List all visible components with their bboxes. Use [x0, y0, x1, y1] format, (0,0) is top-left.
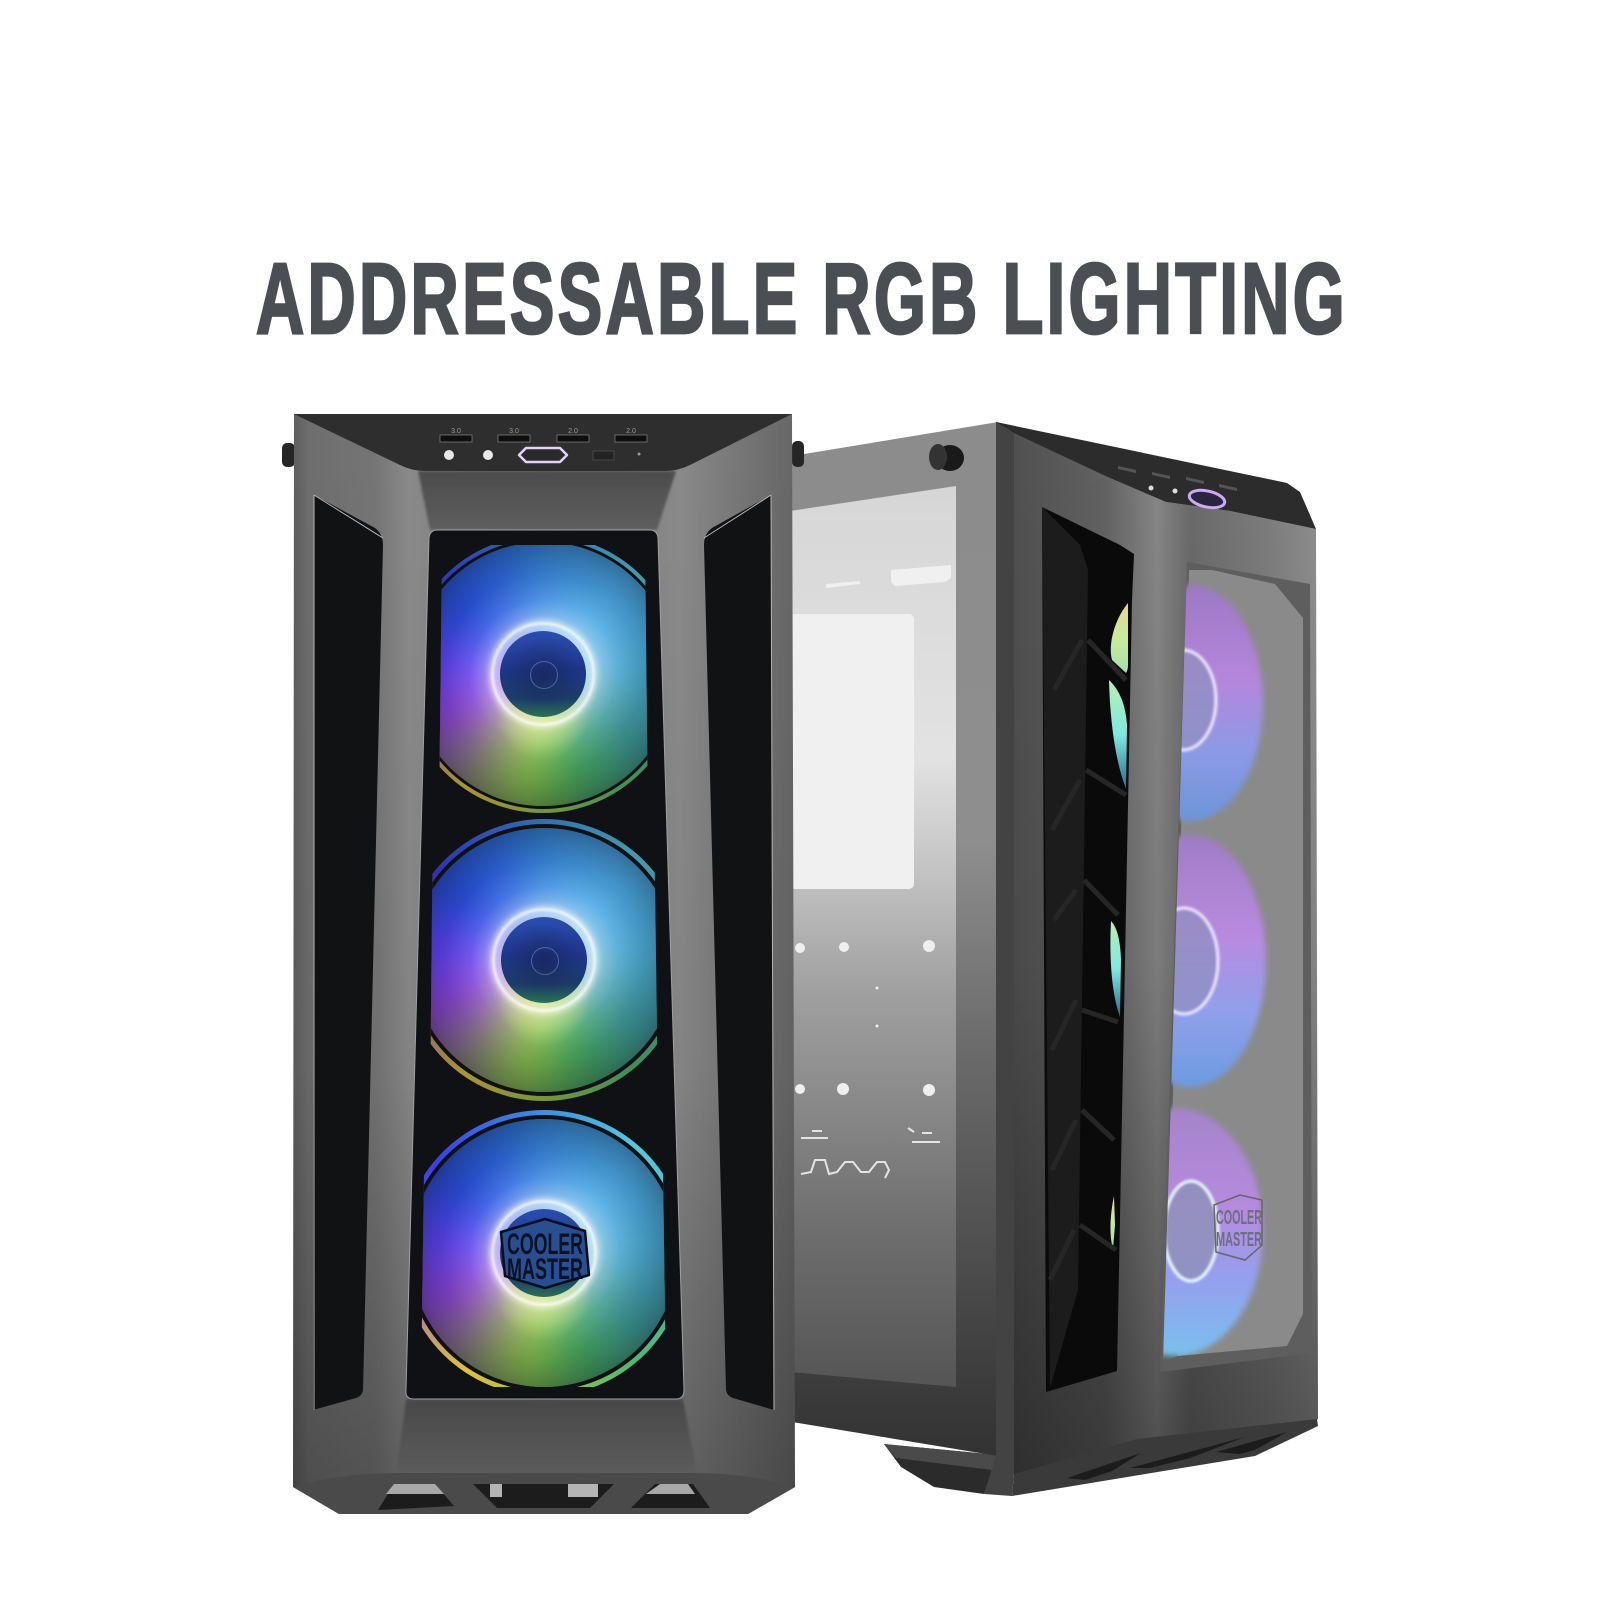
mesh front panel	[1160, 562, 1312, 1372]
internal drive bars	[826, 565, 951, 588]
top I/O panel, angled	[996, 422, 1316, 529]
glowing fans seen through mesh	[1163, 581, 1270, 1360]
side panel frame	[780, 422, 998, 1456]
USB port labels	[451, 428, 636, 435]
USB port labels: 2.0	[568, 428, 578, 435]
USB ports	[440, 435, 647, 442]
slot fan mount ribs	[1050, 640, 1126, 1280]
mesh logo text: MASTER	[1216, 1229, 1262, 1251]
hub logo: MASTER	[507, 1253, 583, 1286]
reset button	[593, 451, 614, 460]
case body	[293, 414, 795, 1514]
USB port labels: 2.0	[626, 428, 636, 435]
rear case: side and front angled view	[780, 422, 1318, 1496]
hub logo: COOLER	[507, 1228, 583, 1261]
mesh logo text	[1214, 1195, 1262, 1260]
right thumbscrew	[792, 441, 804, 467]
side ventilation slot	[1042, 507, 1134, 1392]
right vent slot	[704, 495, 774, 1410]
indicator	[638, 452, 640, 456]
mesh logo text: COOLER	[1216, 1207, 1262, 1229]
USB port labels: 3.0	[451, 428, 461, 435]
upper centre fascia	[418, 471, 676, 530]
RGB fan 1	[440, 545, 648, 813]
left thumbscrew	[282, 443, 295, 467]
hub logo	[501, 1219, 589, 1288]
right base vent	[631, 1484, 710, 1508]
centre base vent	[473, 1484, 614, 1508]
fan window	[406, 530, 684, 1399]
top I/O panel	[294, 414, 792, 471]
base chamfer with vents	[293, 1473, 795, 1514]
RGB fan 2	[430, 819, 658, 1101]
side body panel	[1014, 430, 1318, 1480]
audio jacks	[444, 450, 493, 460]
internal light panel	[790, 614, 914, 889]
USB port labels: 3.0	[509, 428, 519, 435]
lower centre fascia	[396, 1399, 697, 1473]
power button ring	[519, 448, 567, 462]
RGB fan 3	[422, 1110, 666, 1387]
infographic scene	[256, 262, 1342, 1514]
corner strip	[984, 422, 1014, 1496]
angled power ring	[1188, 487, 1226, 511]
internal screw holes	[795, 940, 935, 1096]
angled base with vents	[1012, 1419, 1318, 1496]
angled USB ports	[1118, 466, 1237, 491]
left base vent	[378, 1484, 454, 1510]
side panel thumbscrew	[929, 444, 964, 471]
left vent slot	[313, 495, 383, 1410]
internal cut-outs	[801, 1128, 940, 1178]
tempered glass window	[790, 486, 956, 1387]
rear case foot	[884, 1444, 998, 1494]
angled audio jacks	[1148, 486, 1178, 494]
front case	[282, 414, 804, 1514]
fan light slivers	[1109, 603, 1128, 1249]
